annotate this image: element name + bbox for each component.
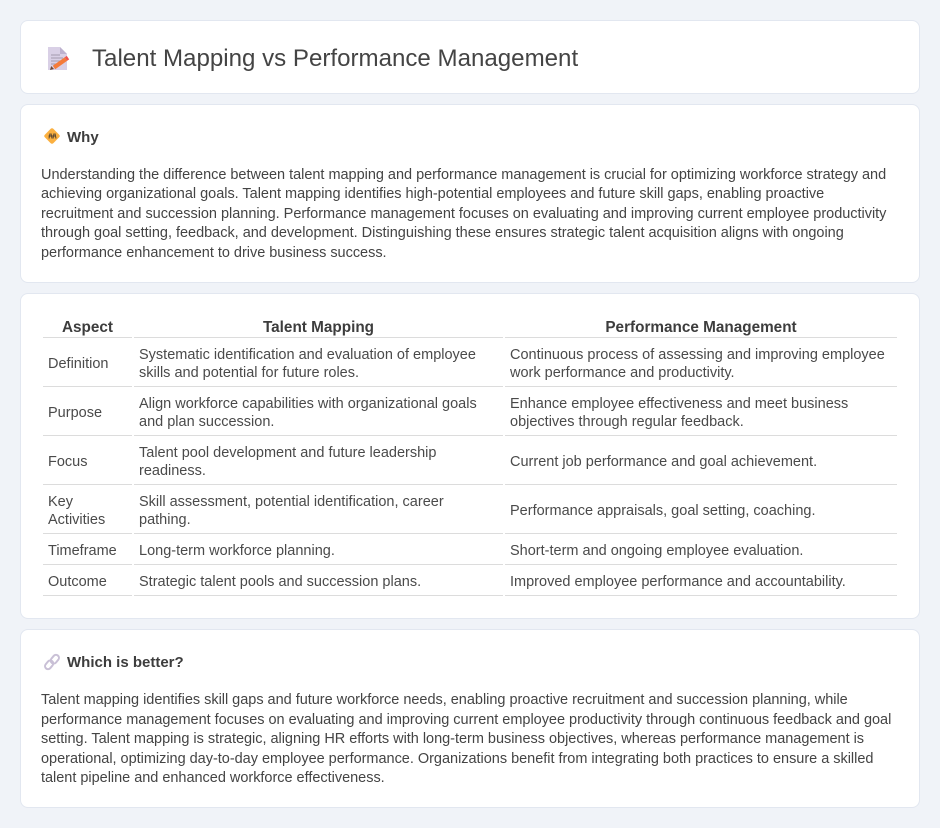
text block: why bbox=[41, 167, 886, 261]
text: Skill assessment, potential identification, career bbox=[139, 494, 444, 510]
text: Performance appraisals, goal setting, coaching. bbox=[510, 503, 815, 519]
text: Key bbox=[48, 494, 73, 510]
text block: which is better bbox=[41, 692, 891, 786]
text: work performance and productivity. bbox=[510, 365, 735, 381]
table header: performance management: Performance Management bbox=[605, 319, 797, 336]
icon: document with pencil bbox=[48, 47, 70, 70]
text: Understanding the difference between talent mapping and performance management is crucial for optimizing workforce strategy and bbox=[41, 167, 886, 183]
text: Current job performance and goal achievement. bbox=[510, 454, 817, 470]
text: operational, optimizing day-to-day employee performance. Organizations benefit from integrating both practices to ensure a skilled bbox=[41, 751, 873, 767]
text: performance management focuses on evaluating and improving current employee productivity through continuous feedback and goal bbox=[41, 712, 891, 728]
text: Purpose bbox=[48, 405, 102, 421]
text: setting. Talent mapping is strategic, aligning HR efforts with long-term business objectives, whereas performance management is bbox=[41, 731, 864, 747]
text: skills and potential for future roles. bbox=[139, 365, 359, 381]
icon: diamond warning sign bbox=[44, 128, 60, 144]
text: pathing. bbox=[139, 512, 191, 528]
text: objectives through regular feedback. bbox=[510, 414, 744, 430]
icon: chain link bbox=[44, 654, 60, 670]
panel: which is better bbox=[20, 629, 920, 808]
text: Align workforce capabilities with organizational goals bbox=[139, 396, 477, 412]
text: Strategic talent pools and succession plans. bbox=[139, 574, 421, 590]
text: Talent pool development and future leadership bbox=[139, 445, 436, 461]
text: readiness. bbox=[139, 463, 206, 479]
text: and plan succession. bbox=[139, 414, 274, 430]
text: Enhance employee effectiveness and meet business bbox=[510, 396, 848, 412]
text: Improved employee performance and accountability. bbox=[510, 574, 846, 590]
text: Timeframe bbox=[48, 543, 117, 559]
text: talent pipeline and enhanced workforce effectiveness. bbox=[41, 770, 385, 786]
panel: comparison table bbox=[20, 293, 920, 619]
row: purpose bbox=[48, 396, 848, 430]
table header: talent mapping: Talent Mapping bbox=[263, 319, 374, 336]
text: Continuous process of assessing and improving employee bbox=[510, 347, 885, 363]
text: Outcome bbox=[48, 574, 107, 590]
text: Long-term workforce planning. bbox=[139, 543, 335, 559]
row: definition bbox=[48, 347, 885, 381]
text: achieving organizational goals. Talent mapping identifies high-potential employees and future skill gaps, enabling proactive bbox=[41, 186, 824, 202]
text: Definition bbox=[48, 356, 108, 372]
text: recruitment and succession planning. Performance management focuses on evaluating and improving current employee productivity bbox=[41, 206, 886, 222]
text: Focus bbox=[48, 454, 88, 470]
text: Talent mapping identifies skill gaps and future workforce needs, enabling proactive recruitment and succession planning, while bbox=[41, 692, 848, 708]
text: Systematic identification and evaluation of employee bbox=[139, 347, 476, 363]
panel: title header bbox=[20, 20, 920, 94]
row: key activities bbox=[48, 494, 815, 528]
heading: which is better: Which is better? bbox=[67, 654, 184, 671]
row: timeframe bbox=[48, 543, 803, 559]
text: performance enhancement to drive business success. bbox=[41, 245, 387, 261]
row: focus bbox=[48, 445, 817, 479]
title: Talent Mapping vs Performance Management bbox=[92, 45, 578, 72]
heading: why: Why bbox=[67, 129, 99, 146]
text: through goal setting, feedback, and development. Distinguishing these ensures strategic talent acquisition aligns with ongoing bbox=[41, 225, 844, 241]
table header: aspect: Aspect bbox=[62, 319, 113, 336]
text: Activities bbox=[48, 512, 105, 528]
text: Short-term and ongoing employee evaluation. bbox=[510, 543, 803, 559]
row: outcome bbox=[48, 574, 846, 590]
panel: why bbox=[20, 104, 920, 283]
